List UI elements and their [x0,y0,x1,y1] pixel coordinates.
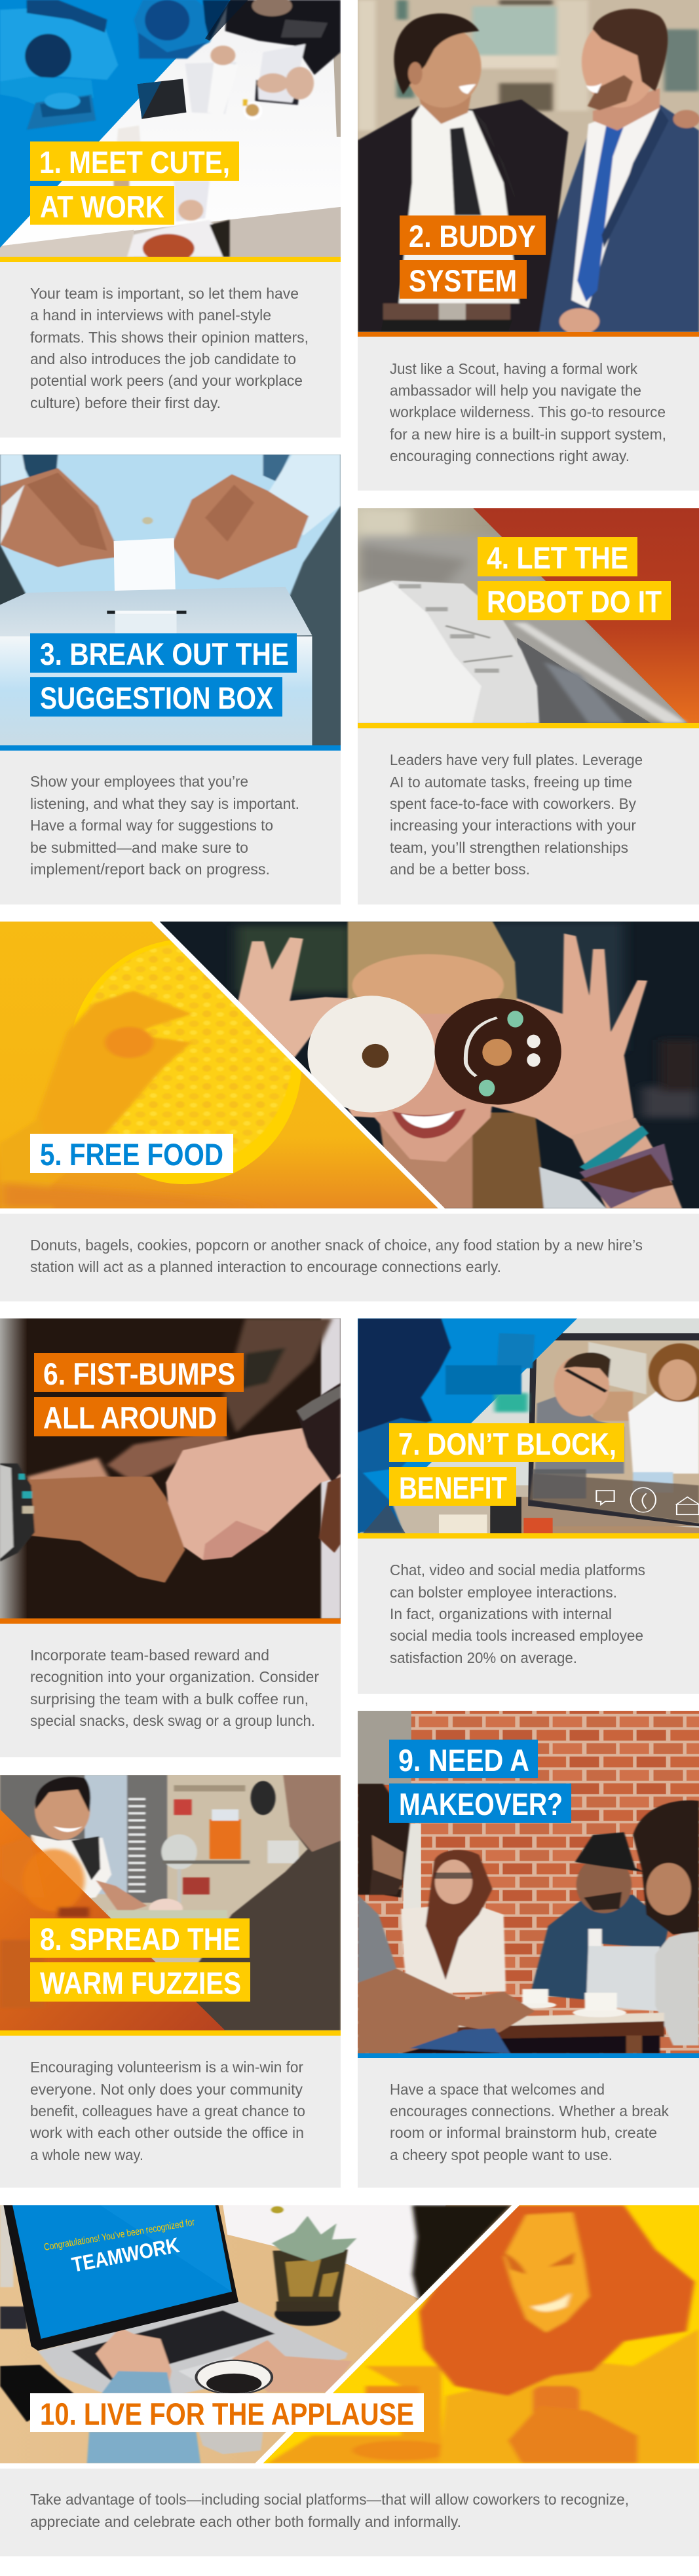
body text: everyone. Not only does your community [30,2081,303,2098]
body text: and be a better boss. [390,861,530,878]
text card [0,2469,699,2556]
panel: 9 makeover [358,1711,699,2188]
body text: Show your employees that you’re [30,773,248,790]
accent bar [0,2030,341,2036]
body text: room or informal brainstorm hub, create [390,2124,657,2141]
body text [389,360,666,464]
accent bar [358,332,699,337]
body text: a whole new way. [30,2146,143,2163]
heading: 3. Break out the suggestion box [30,633,297,717]
body text: can bolster employee interactions. [390,1584,617,1601]
body text [30,1647,319,1729]
body text: satisfaction 20% on average. [390,1649,577,1666]
accent bar [358,723,699,728]
accent bar [358,2053,699,2058]
body text: In fact, organizations with internal [390,1605,612,1622]
photo: team at cafe table with brick wall [358,1711,699,2053]
body text: listening, and what they say is important. [30,795,299,812]
body text [29,2059,305,2163]
laptop screen text: TEAMWORK [70,2233,181,2277]
photo: robot hand on laptop [358,508,699,723]
panel: 7 don't block [358,1318,699,1694]
body text: for a new hire is a built-in support system, [390,426,666,443]
accent bar [358,1533,699,1539]
body text: social media tools increased employee [390,1627,643,1644]
heading: 10. Live for the applause: 10. LIVE FOR THE APPLAUSE [40,2397,414,2431]
body text: culture) before their first day. [30,394,221,411]
heading: 3. Break out the suggestion box: SUGGESTION BOX [40,681,273,715]
body text: potential work peers (and your workplace [30,372,303,389]
panel: 2 buddy system [358,0,699,491]
heading: 4. Let the robot do it: ROBOT DO IT [487,584,662,619]
photo: volunteer serving food with orange overlay [0,1775,341,2030]
panel: 1 meet cute [0,0,341,438]
text card [358,1539,699,1694]
heading: 2. Buddy system: SYSTEM [409,263,517,298]
body text: and also introduces the job candidate to [30,350,296,367]
text card [358,337,699,491]
heading: 4. Let the robot do it [478,537,671,620]
accent bar [0,745,341,751]
body text: recognition into your organization. Consider [30,1668,319,1685]
body text: Donuts, bagels, cookies, popcorn or another snack of choice, any food station by a new hire’s [30,1237,643,1254]
body text: Your team is important, so let them have [30,285,299,302]
heading: 9. Need a makeover?: MAKEOVER? [399,1787,563,1821]
text card [358,728,699,905]
heading: 7. Don't block, benefit [389,1423,624,1506]
body text: a cheery spot people want to use. [390,2146,613,2163]
panel: 6 fist bumps [0,1318,341,1757]
body text: Chat, video and social media platforms [390,1561,645,1578]
panel: 4 robot [358,508,699,905]
body text: implement/report back on progress. [30,861,270,878]
body text: station will act as a planned interaction to encourage connections early. [30,1258,501,1275]
text card [0,1214,699,1301]
accent bar [0,257,341,262]
heading: 7. Don't block, benefit: BENEFIT [399,1470,507,1505]
heading: 1. Meet cute, at work: 1. MEET CUTE, [39,145,230,179]
heading: 1. Meet cute, at work: AT WORK [40,189,164,224]
heading: 8. Spread the warm fuzzies: WARM FUZZIES [40,1966,241,2000]
heading: 9. Need a makeover? [389,1740,571,1823]
heading: 2. Buddy system: 2. BUDDY [409,219,536,253]
panel: 3 suggestion box [0,455,341,905]
body text: workplace wilderness. This go-to resource [389,403,666,420]
body text [390,1561,645,1666]
icons: chat, phone, money [596,1487,699,1514]
photo: laptop recognition and woman with phone [0,2205,699,2463]
tablet on table [138,79,187,119]
text card [0,2036,341,2188]
heading: 5. Free food: 5. FREE FOOD [40,1137,223,1172]
heading: 7. Don't block, benefit: 7. DON’T BLOCK, [398,1427,616,1461]
body text: Leaders have very full plates. Leverage [390,751,643,768]
body text: Have a formal way for suggestions to [30,817,273,834]
body text: a hand in interviews with panel-style [30,307,271,324]
photo: overhead interview table with blue overlay [0,0,341,257]
body text [30,2491,629,2530]
body text: appreciate and celebrate each other both formally and informally. [30,2513,461,2530]
photo: video call on monitor with blue overlay [358,1318,699,1533]
body text: Incorporate team-based reward and [30,1647,269,1664]
body text: increasing your interactions with your [390,817,636,834]
body text: surprising the team with a bulk coffee run, [30,1690,309,1708]
body text: Have a space that welcomes and [390,2081,605,2098]
body text: Just like a Scout, having a formal work [390,360,637,377]
heading: 3. Break out the suggestion box: 3. BREAK OUT THE [40,637,289,671]
body text: be submitted—and make sure to [30,839,248,856]
text card [358,2058,699,2188]
body text: team, you’ll strengthen relationships [390,839,628,856]
body text: Take advantage of tools—including social platforms—that will allow coworkers to recognize, [30,2491,629,2508]
body text: spent face-to-face with coworkers. By [390,795,636,812]
body text: special snacks, desk swag or a group lunch. [30,1712,315,1729]
body text: AI to automate tasks, freeing up time [390,774,632,791]
panel: 8 warm fuzzies [0,1775,341,2188]
body text [30,1237,643,1275]
heading: 8. Spread the warm fuzzies: 8. SPREAD THE [40,1922,240,1956]
body text: formats. This shows their opinion matters, [30,329,309,346]
panel: 10 applause [0,2205,699,2556]
accent bar [0,1618,341,1624]
body text: Encouraging volunteerism is a win-win for [30,2059,303,2076]
heading: 9. Need a makeover?: 9. NEED A [398,1743,529,1778]
heading: 6. Fist-bumps all around: ALL AROUND [43,1400,217,1435]
body text: ambassador will help you navigate the [390,382,641,399]
text card [0,751,341,905]
text card [0,262,341,438]
body text [390,2081,669,2163]
photo: hands dropping paper in box [0,455,341,745]
body text: benefit, colleagues have a great chance to [30,2102,305,2119]
body text [390,751,643,878]
heading: 8. Spread the warm fuzzies [30,1918,250,2002]
heading: 6. Fist-bumps all around [34,1353,244,1436]
photo: popcorn and woman with donuts [0,922,699,1208]
heading: 4. Let the robot do it: 4. LET THE [487,540,628,575]
panel: 5 free food [0,922,699,1301]
body text: encouraging connections right away. [390,447,630,464]
heading: 1. Meet cute, at work [30,141,239,225]
heading: 6. Fist-bumps all around: 6. FIST-BUMPS [43,1356,235,1391]
laptop screen text [43,2216,195,2277]
text card [0,1624,341,1757]
body text [30,773,299,878]
body text: encourages connections. Whether a break [390,2102,669,2119]
heading: 2. Buddy system [400,215,546,299]
photo: two businessmen smiling [358,0,699,332]
body text: work with each other outside the office in [29,2124,304,2141]
laptop screen text: Congratulations! You’ve been recognized for [43,2216,195,2253]
body text [30,285,309,411]
photo: two fists bumping [0,1318,341,1618]
